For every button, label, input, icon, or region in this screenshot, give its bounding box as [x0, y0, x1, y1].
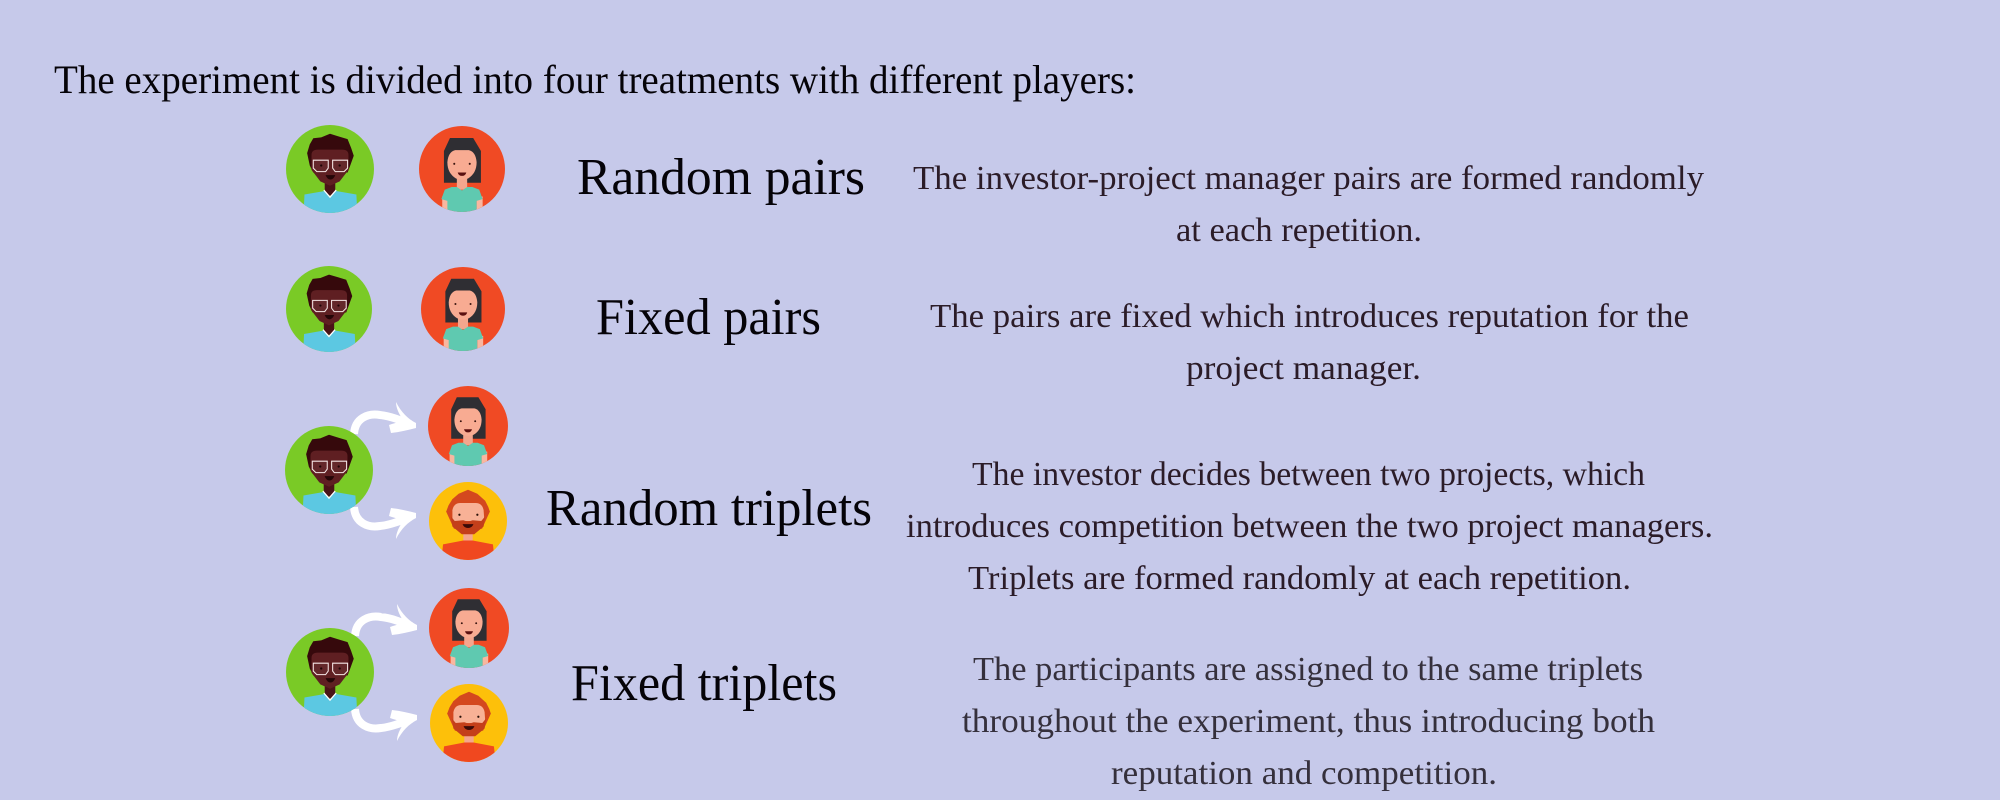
title: The experiment is divided into four treatments with different players: — [54, 57, 1136, 102]
text: random pairs description — [913, 160, 1704, 249]
arrow: to project manager one — [355, 604, 417, 636]
panel: fixed triplets — [286, 588, 1655, 792]
heading: fixed pairs: Fixed pairs — [596, 289, 821, 346]
arrow: to project manager one — [354, 402, 416, 434]
panel: fixed pairs — [286, 266, 1689, 387]
icon: project manager two — [429, 482, 507, 560]
heading: random pairs: Random pairs — [577, 149, 865, 206]
panel: random triplets — [285, 386, 1713, 597]
text: random pairs description: at each repetition. — [1176, 212, 1422, 249]
icon: project manager — [419, 126, 505, 212]
icon: investor — [286, 266, 372, 352]
panel: random pairs — [286, 125, 1704, 249]
text: fixed triplets description: throughout the experiment, thus introducing both — [962, 703, 1655, 740]
text: fixed pairs description — [930, 298, 1689, 387]
icon: investor — [285, 426, 373, 514]
icon: project manager — [421, 267, 505, 351]
icon: project manager one — [428, 386, 508, 466]
text: random triplets description: The investor decides between two projects, which — [972, 456, 1645, 493]
text: fixed triplets description: The participants are assigned to the same triplets — [973, 651, 1643, 688]
arrow: to project manager two — [355, 709, 417, 741]
icon: investor — [286, 628, 374, 716]
text: random triplets description — [906, 456, 1713, 597]
icon: investor — [286, 125, 374, 213]
text: random triplets description: Triplets are formed randomly at each repetition. — [968, 560, 1631, 597]
text: fixed pairs description: project manager. — [1186, 350, 1421, 387]
text: fixed triplets description — [962, 651, 1655, 792]
text: random triplets description: introduces competition between the two project managers. — [906, 508, 1713, 545]
icon: project manager one — [429, 588, 509, 668]
icon: project manager two — [430, 684, 508, 762]
text: random pairs description: The investor-project manager pairs are formed randomly — [913, 160, 1704, 197]
heading: fixed triplets: Fixed triplets — [571, 655, 837, 712]
text: fixed pairs description: The pairs are fixed which introduces reputation for the — [930, 298, 1689, 335]
heading: random triplets: Random triplets — [546, 480, 872, 537]
arrow: to project manager two — [354, 507, 416, 539]
text: fixed triplets description: reputation and competition. — [1111, 755, 1497, 792]
